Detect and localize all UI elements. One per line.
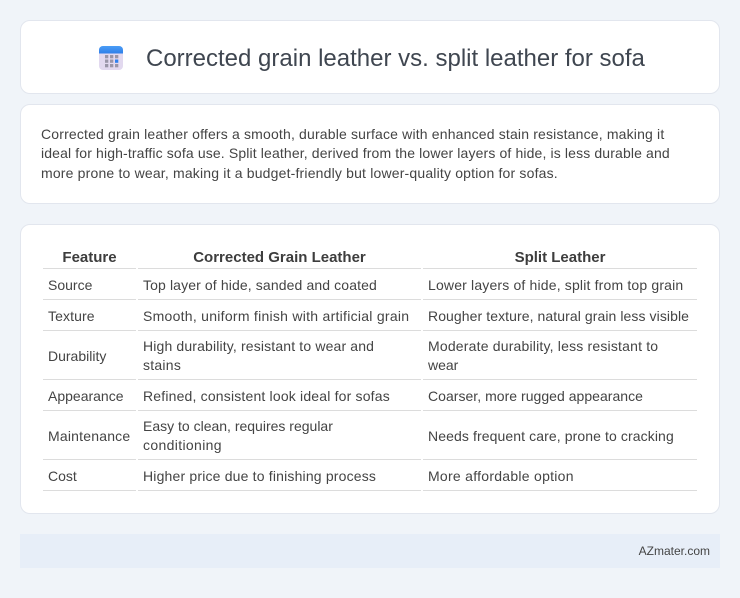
row: texture xyxy=(48,308,689,324)
comparison table: wear xyxy=(428,356,458,372)
comparison table: Refined, consistent look ideal for sofas xyxy=(143,388,390,404)
row: cost: Cost xyxy=(48,468,77,484)
comparison table: Easy to clean, requires regular xyxy=(143,418,333,434)
intro text: Corrected grain leather offers a smooth, durable surface with enhanced stain resistance, making it xyxy=(41,126,664,142)
footer brand: AZmater.com xyxy=(639,544,710,558)
comparison table: Smooth, uniform finish with artificial grain xyxy=(143,308,409,324)
header: feature: Feature xyxy=(62,249,117,266)
row: durability xyxy=(48,338,658,372)
table card xyxy=(20,224,720,514)
row: appearance xyxy=(48,388,643,404)
comparison table: stains xyxy=(143,356,181,372)
comparison table xyxy=(43,249,697,491)
row: cost xyxy=(48,468,574,484)
comparison table: Higher price due to finishing process xyxy=(143,468,376,484)
footer bar xyxy=(20,534,720,568)
header: corrected grain leather: Corrected Grain Leather xyxy=(193,249,366,266)
comparison table: Coarser, more rugged appearance xyxy=(428,388,643,404)
title: Corrected grain leather vs. split leather for sofa xyxy=(146,45,645,72)
comparison table: More affordable option xyxy=(428,468,574,484)
comparison table: Moderate durability, less resistant to xyxy=(428,338,658,354)
comparison table: Top layer of hide, sanded and coated xyxy=(143,277,377,293)
comparison table: Needs frequent care, prone to cracking xyxy=(428,428,674,444)
row: source: Source xyxy=(48,277,92,293)
row: appearance: Appearance xyxy=(48,388,124,404)
intro card xyxy=(20,104,720,204)
row: source xyxy=(48,277,683,293)
intro text: more prone to wear, making it a budget-friendly but lower-quality option for sofas. xyxy=(41,165,558,181)
row: durability: Durability xyxy=(48,348,106,364)
header: split leather: Split Leather xyxy=(515,249,605,266)
intro text xyxy=(41,126,670,181)
comparison table: conditioning xyxy=(143,436,222,452)
title card xyxy=(20,20,720,94)
comparison table: Rougher texture, natural grain less visible xyxy=(428,308,689,324)
row: texture: Texture xyxy=(48,308,95,324)
comparison table: Lower layers of hide, split from top grain xyxy=(428,277,683,293)
row: maintenance: Maintenance xyxy=(48,428,130,444)
icon: calendar xyxy=(99,46,123,70)
comparison table: High durability, resistant to wear and xyxy=(143,338,374,354)
intro text: ideal for high-traffic sofa use. Split leather, derived from the lower layers of hide, is less durable and xyxy=(41,145,670,161)
row: maintenance xyxy=(48,418,674,453)
